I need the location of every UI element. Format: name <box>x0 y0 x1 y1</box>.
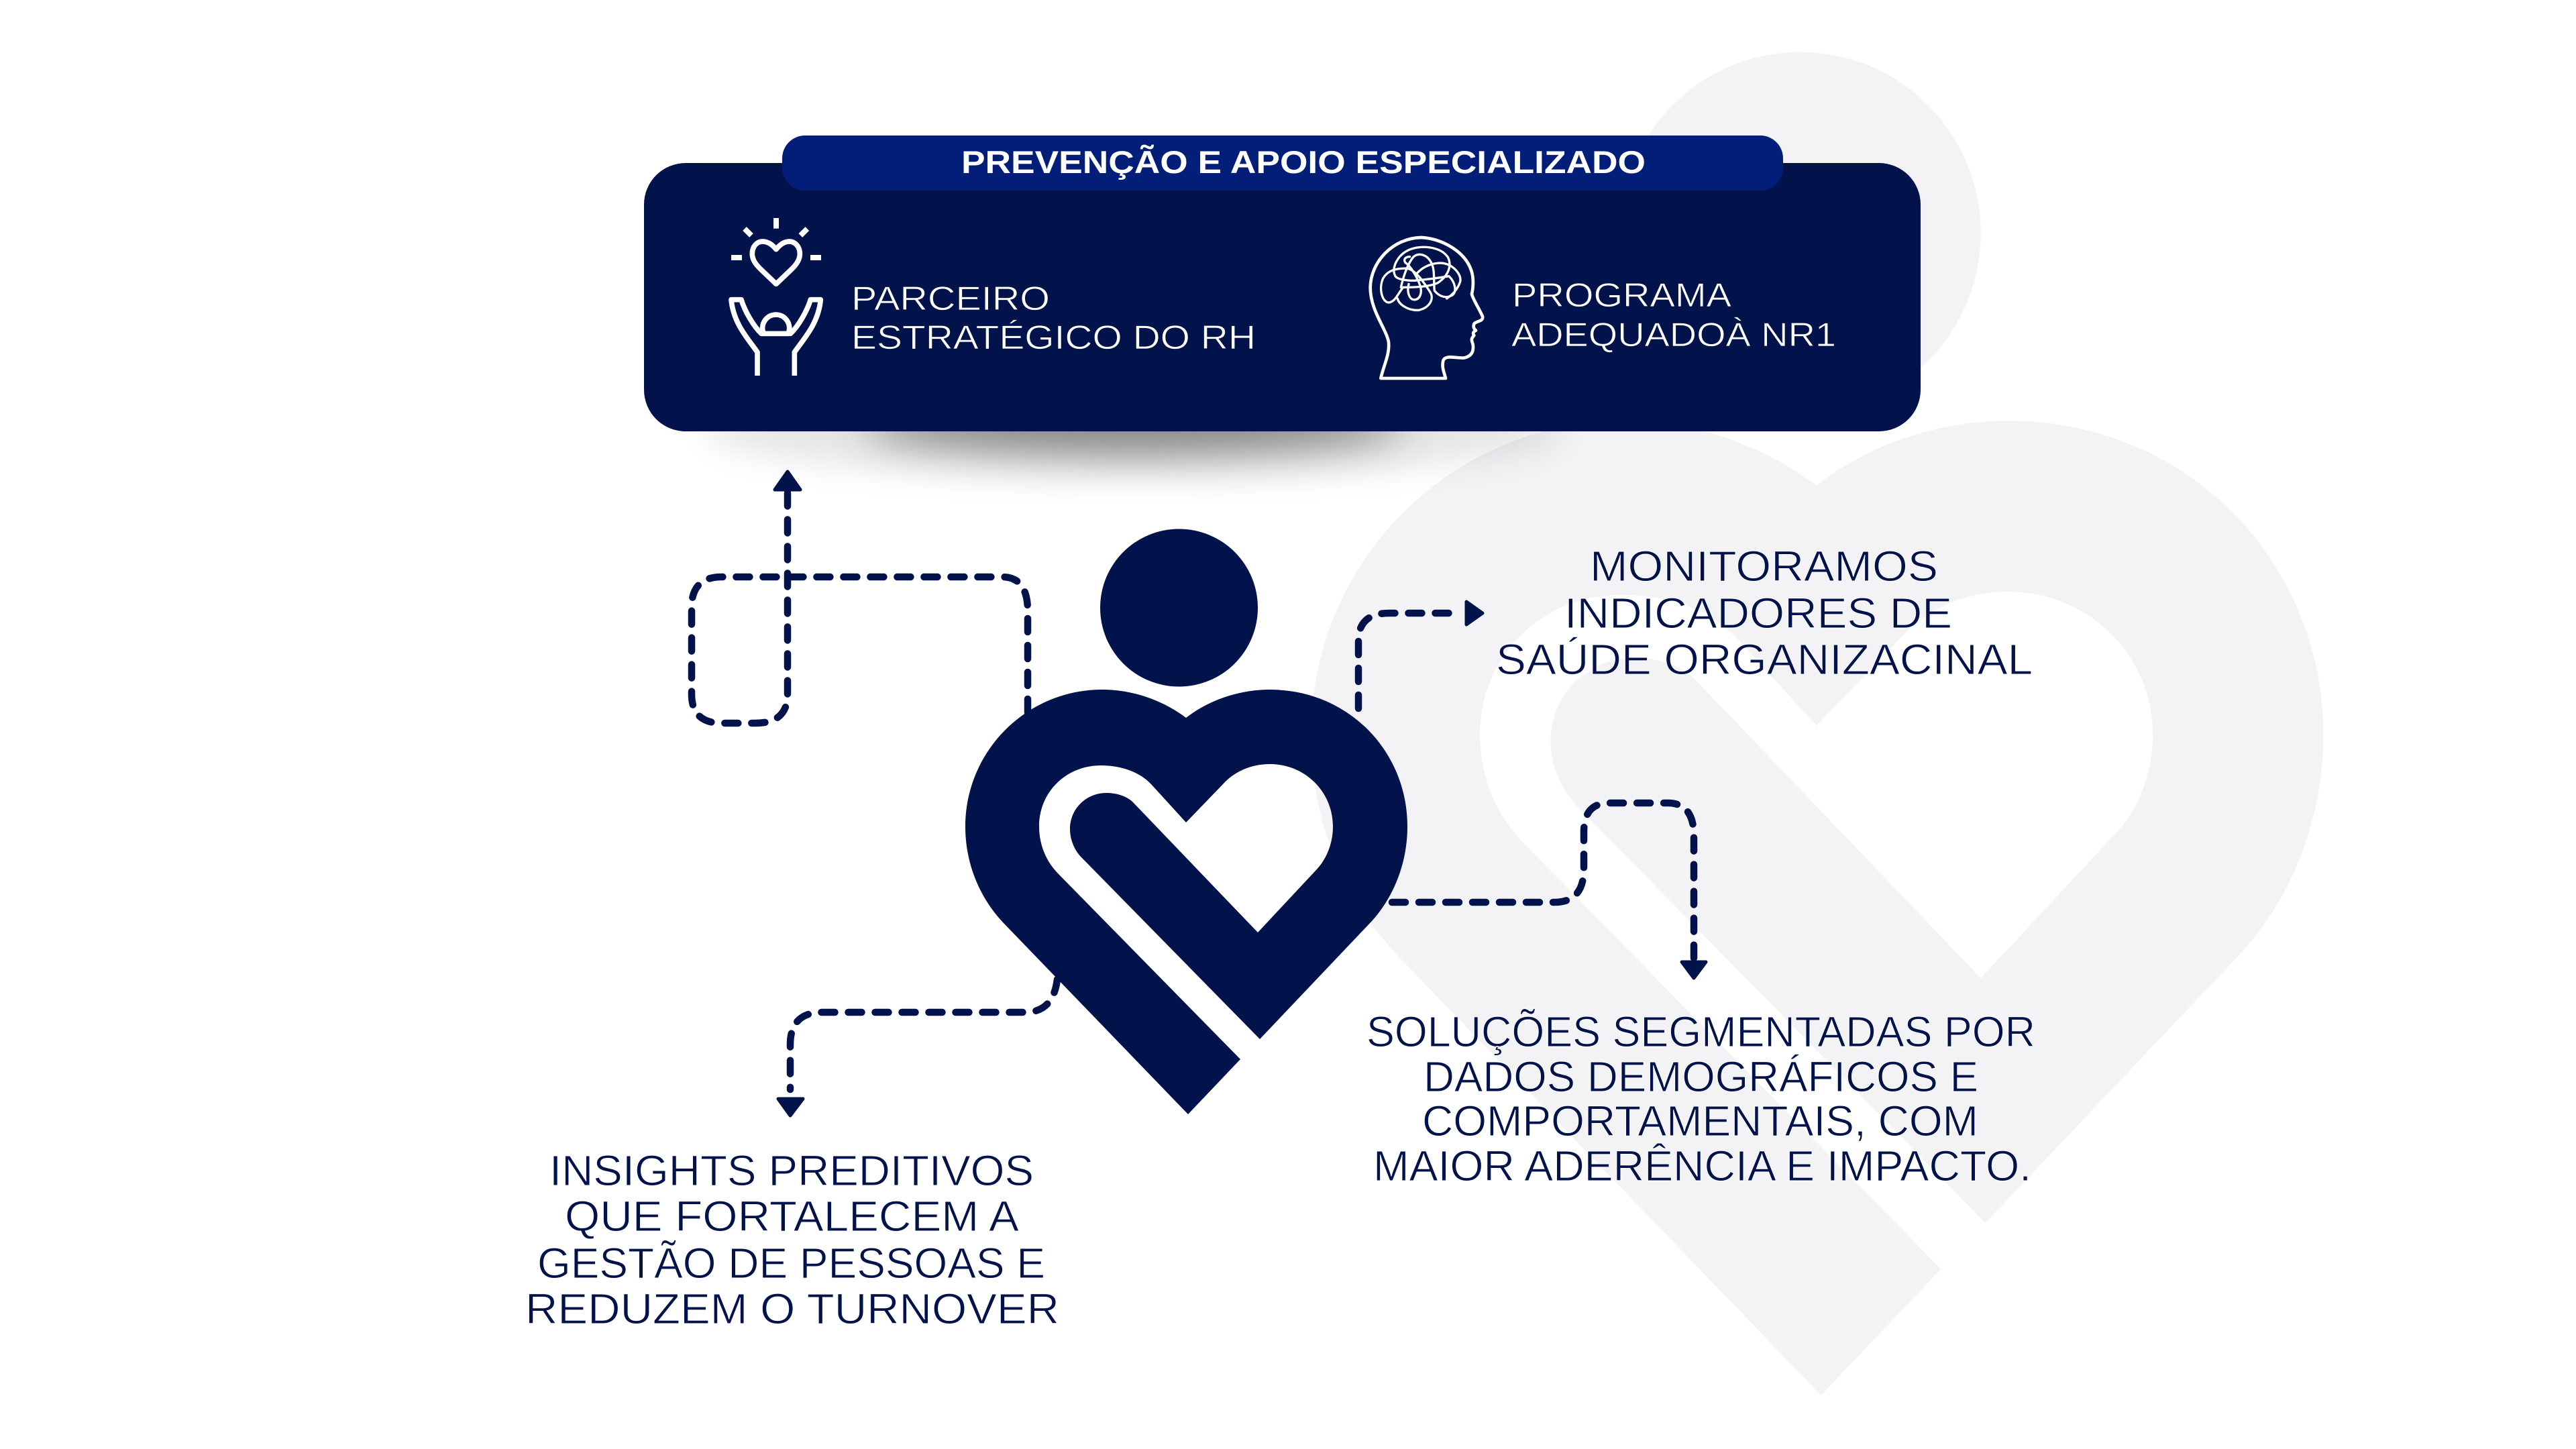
text: monitoring: SAÚDE ORGANIZACINAL <box>1496 635 2033 684</box>
text: programa adequado à NR1: ADEQUADOÀ NR1 <box>1511 316 1836 354</box>
panel: prevention and specialised support <box>644 136 1921 431</box>
text: programa adequado à NR1 <box>1511 276 1836 354</box>
arrow: dashed path to segmented solutions text <box>1392 803 1706 978</box>
heading pill: PREVENÇÃO E APOIO ESPECIALIZADO <box>961 144 1646 180</box>
icon: person raising heart <box>731 218 821 376</box>
text: monitoring <box>1496 542 2033 684</box>
heading pill <box>782 136 1783 191</box>
card shadow <box>704 382 1563 476</box>
text: segmented solutions: DADOS DEMOGRÁFICOS E <box>1424 1053 1978 1101</box>
text: segmented solutions: SOLUÇÕES SEGMENTADAS POR <box>1366 1008 2035 1056</box>
text: parceiro estratégico: ESTRATÉGICO DO RH <box>851 319 1256 356</box>
text: predictive insights <box>525 1146 1059 1333</box>
text: predictive insights: QUE FORTALECEM A <box>565 1192 1019 1240</box>
text: monitoring: MONITORAMOS <box>1590 542 1938 590</box>
text: predictive insights: INSIGHTS PREDITIVOS <box>549 1146 1034 1195</box>
text: programa adequado à NR1: PROGRAMA <box>1512 276 1732 314</box>
text: monitoring: INDICADORES DE <box>1564 589 1952 637</box>
text: predictive insights: GESTÃO DE PESSOAS E <box>537 1239 1045 1287</box>
text: parceiro estratégico <box>851 280 1256 356</box>
text: parceiro estratégico: PARCEIRO <box>851 280 1050 317</box>
text: predictive insights: REDUZEM O TURNOVER <box>525 1285 1059 1333</box>
card background <box>644 163 1921 431</box>
text: segmented solutions: COMPORTAMENTAIS, COM <box>1422 1097 1978 1145</box>
text: segmented solutions <box>1366 1008 2035 1190</box>
background watermark: heart logo <box>1311 52 2323 1395</box>
central heart logo <box>965 529 1407 1114</box>
arrow: dashed path to monitoring text <box>1358 602 1483 708</box>
text: segmented solutions: MAIOR ADERÊNCIA E IMPACTO. <box>1373 1142 2031 1190</box>
icon: head with tangled thoughts <box>1371 237 1483 378</box>
arrow: dashed path to predictive insights text <box>778 979 1057 1116</box>
arrow: dashed path to top card <box>692 472 1028 723</box>
